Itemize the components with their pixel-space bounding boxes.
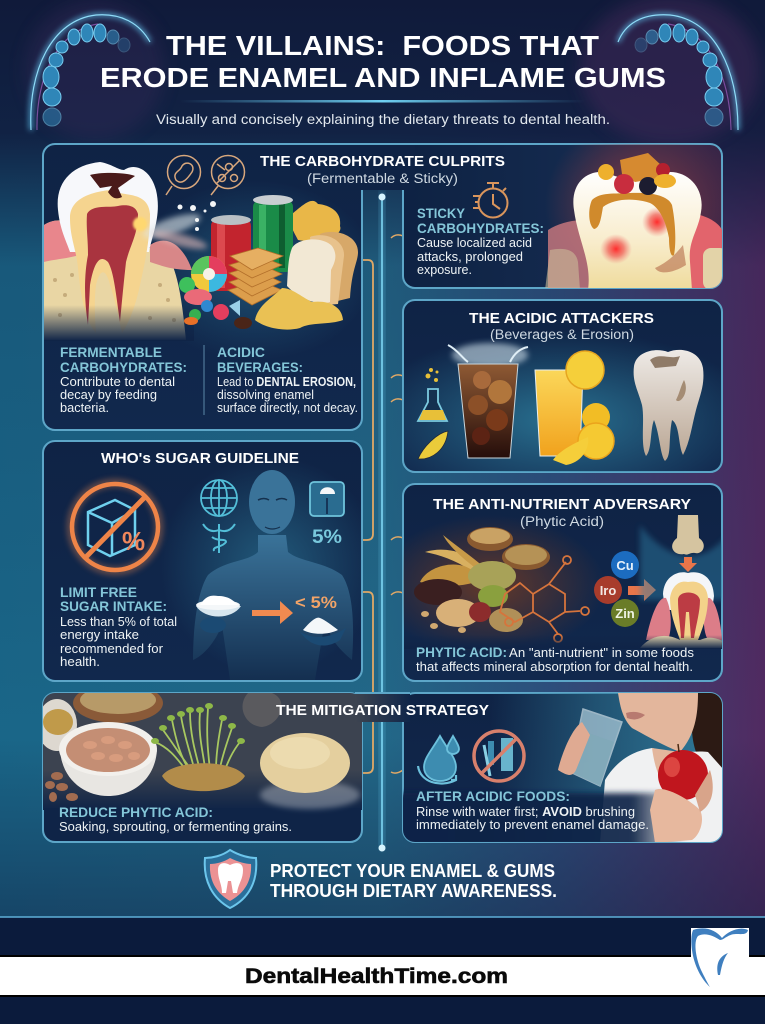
text: fermentable carbohydrates: Contribute to dental (60, 374, 175, 389)
fade behind caption (395, 793, 685, 853)
illustration: soda cans (211, 195, 293, 291)
central connector line with orange brackets (362, 192, 403, 852)
illustration: small grain bowl (37, 699, 77, 751)
label: 5%: 5% (312, 527, 342, 548)
panel: mitigation right (395, 693, 725, 853)
icon: water drop with rinse (418, 736, 459, 784)
text: sticky carbohydrates: CARBOHYDRATES: (417, 220, 544, 236)
illustration: soaked beans bowl (45, 722, 157, 802)
text: limit free sugar intake: LIMIT FREE (60, 584, 137, 600)
heading: anti-nutrient adversary: THE ANTI-NUTRIENT ADVERSARY (433, 496, 691, 513)
illustration: sprouted grains (151, 703, 245, 791)
illustration: phytic acid molecule (500, 556, 589, 642)
heading: the carbohydrate culprits: THE CARBOHYDRATE CULPRITS (260, 153, 505, 170)
icon: site logo tooth (691, 928, 749, 987)
illustration: eroded tooth (634, 350, 703, 461)
illustration: chips front (255, 288, 343, 330)
icon: zinc mineral (611, 599, 639, 627)
icon: copper mineral (611, 551, 639, 579)
illustration: sticky tooth with caramel (545, 144, 722, 288)
text: limit free sugar intake (60, 584, 177, 669)
illustration: red apple (650, 744, 713, 843)
illustration: chips back (291, 201, 340, 241)
illustration: bread loaf (287, 232, 358, 306)
illustration: bone and tooth (640, 515, 735, 648)
text: phytic acid: An "anti-nutrient" in some foods (509, 645, 695, 660)
panel: the anti-nutrient adversary (375, 484, 735, 681)
divider between columns (204, 345, 205, 415)
illustration: crackers (228, 248, 283, 305)
icon: iron mineral (594, 576, 622, 604)
heading: the carbohydrate culprits: (Fermentable & Sticky) (307, 171, 458, 186)
closing message: PROTECT YOUR ENAMEL & GUMS (270, 861, 555, 881)
bridge joining the two top panels (350, 144, 415, 190)
panel: carbohydrate culprits left (43, 144, 375, 430)
illustration: small sugar portion (300, 618, 346, 646)
icon: no sugar cube (71, 483, 159, 571)
text: limit free sugar intake: energy intake (60, 627, 139, 642)
text: after acidic foods: AFTER ACIDIC FOODS: (416, 788, 570, 804)
panel: WHO's sugar guideline (43, 441, 380, 681)
illustration: lentil bowl (73, 683, 163, 723)
illustration: grains and legumes (414, 527, 550, 633)
text: acidic beverages: surface directly, not decay. (217, 400, 358, 415)
text: reduce phytic acid: Soaking, sprouting, or fermenting grains. (59, 819, 292, 834)
title (100, 30, 666, 93)
text: fermentable carbohydrates (60, 344, 187, 415)
arrow: minerals to tooth (628, 579, 656, 601)
text: fermentable carbohydrates: CARBOHYDRATES: (60, 359, 187, 375)
icon: zinc mineral: Zin (615, 606, 635, 621)
glowing divider under title (180, 100, 585, 102)
heading: acidic attackers (469, 310, 654, 342)
text: phytic acid: that affects mineral absorption for dental health. (416, 659, 693, 674)
text: acidic beverages: dissolving enamel (217, 387, 314, 402)
icon: stopwatch (473, 183, 508, 218)
heading: acidic attackers: (Beverages & Erosion) (490, 327, 634, 342)
illustration: tooth cross section (44, 162, 194, 341)
heading: the carbohydrate culprits (260, 153, 505, 186)
illustration: lemon juice (535, 351, 614, 465)
text: limit free sugar intake: SUGAR INTAKE: (60, 598, 167, 614)
illustration: human figure (193, 470, 353, 680)
icon: globe (201, 480, 237, 516)
heading: the mitigation strategy: THE MITIGATION STRATEGY (276, 702, 489, 719)
text: acidic beverages: ACIDIC (217, 344, 265, 360)
text: reduce phytic acid (59, 804, 292, 834)
footer band: DentalHealthTime.com (245, 965, 508, 988)
closing message (270, 861, 557, 901)
text: fermentable carbohydrates: bacteria. (60, 400, 109, 415)
text: acidic beverages: BEVERAGES: (217, 359, 303, 375)
heading: WHO's sugar guideline: WHO's SUGAR GUIDELINE (101, 450, 299, 467)
illustration: background stoneware (243, 693, 281, 727)
icon: crossed molecule (211, 156, 244, 195)
text: after acidic foods: immediately to prevent enamel damage. (416, 817, 649, 832)
icon: bacteria (166, 156, 200, 195)
panel: mitigation left (37, 683, 362, 842)
heading: acidic attackers: THE ACIDIC ATTACKERS (469, 310, 654, 327)
panel: sticky carbohydrates (402, 143, 723, 289)
illustration: large sugar bowl (196, 596, 241, 633)
text: after acidic foods: Rinse with water first; AVOID brushing (416, 804, 635, 819)
text: fermentable carbohydrates: decay by feeding (60, 387, 157, 402)
icon: flask (418, 368, 447, 421)
icon: caduceus (203, 524, 235, 553)
icon: no sugar cube: % (122, 526, 145, 556)
illustration: acid spray from tooth (133, 201, 216, 253)
illustration: cola glass (448, 343, 528, 458)
text: limit free sugar intake: health. (60, 654, 100, 669)
text: sticky carbohydrates (417, 205, 544, 277)
text: sticky carbohydrates: Cause localized acid (417, 235, 532, 250)
text: sticky carbohydrates: exposure. (417, 262, 472, 277)
icon: glowing left dental arch (31, 15, 150, 130)
illustration: water glass (558, 709, 622, 786)
illustration: dough ball (260, 733, 360, 809)
footer band (0, 955, 765, 997)
bridge joining the two mitigation panels (355, 693, 410, 722)
icon: scale (310, 482, 344, 516)
text: limit free sugar intake: recommended for (60, 641, 164, 656)
icon: copper mineral: Cu (616, 558, 634, 573)
icon: glowing right dental arch (618, 15, 738, 130)
subtitle: Visually and concisely explaining the dietary threats to dental health. (156, 112, 610, 127)
icon: iron mineral: Iro (600, 583, 616, 598)
text: limit free sugar intake: Less than 5% of total (60, 614, 177, 629)
text: acidic beverages: Lead to DENTAL EROSION, (217, 374, 356, 389)
heading: anti-nutrient adversary (433, 496, 691, 529)
illustration: lollipop and candies (179, 256, 252, 329)
text: fermentable carbohydrates: FERMENTABLE (60, 344, 162, 360)
closing message: THROUGH DIETARY AWARENESS. (270, 881, 557, 901)
heading: anti-nutrient adversary: (Phytic Acid) (520, 514, 604, 529)
icon: no brushing (474, 731, 524, 781)
text: phytic acid (416, 644, 695, 674)
title: ERODE ENAMEL AND INFLAME GUMS (100, 62, 666, 93)
arrow: large to small (252, 601, 293, 624)
illustration: woman (600, 693, 725, 843)
label: under 5%: < 5% (295, 593, 337, 612)
text: phytic acid: PHYTIC ACID: (416, 644, 507, 660)
text: sticky carbohydrates: STICKY (417, 205, 466, 221)
panel: the acidic attackers (402, 299, 723, 473)
text: acidic beverages (217, 344, 358, 415)
text: reduce phytic acid: REDUCE PHYTIC ACID: (59, 804, 213, 820)
text: sticky carbohydrates: attacks, prolonged (417, 249, 523, 264)
bottom divider (0, 916, 765, 918)
icon: lemon slice (418, 431, 448, 459)
icon: tooth shield (205, 850, 256, 908)
text: after acidic foods (416, 788, 649, 832)
title: THE VILLAINS: FOODS THAT (166, 30, 599, 61)
